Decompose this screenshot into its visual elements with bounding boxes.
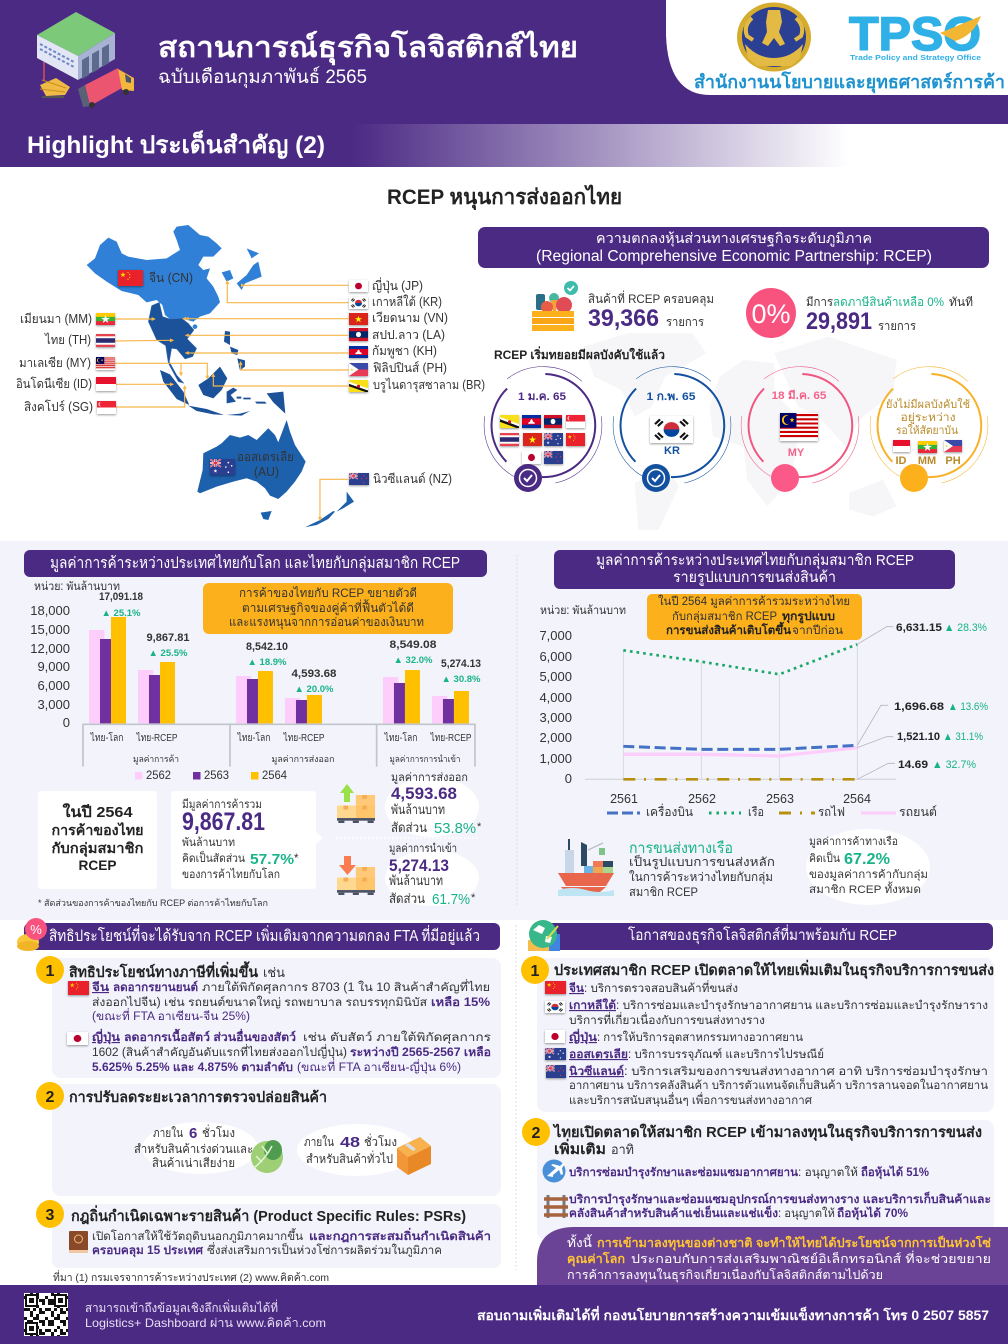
map labels: (AU) [254,465,279,479]
y axis labels: 6,000 [37,678,70,693]
export and import blobs [385,777,479,906]
growth labels [102,608,481,695]
stat: goods covered: 39,366 [588,305,659,332]
panel: benefit 2 clearance: ชั่วโมง [202,1124,235,1140]
panel: benefit 3 PSRs: และกฎการสะสมถิ่นกำเนิดสินค้า [309,1227,491,1243]
stat: import: มูลค่าการนำเข้า [389,842,457,855]
category labels: ไทย-RCEP [136,732,178,744]
panel: opportunity 2: เพิ่มเติม [554,1138,606,1158]
legend: 2563 [204,768,229,782]
heading: RCEP: RCEP หนุนการส่งออกไทย [387,184,622,211]
panel: trade value heading: มูลค่าการค้าระหว่างประเทศไทยกับโลก และไทยกับกลุ่มสมาชิก RCEP [50,554,460,573]
icon: export crates [337,784,375,823]
panel: opportunity 2: บริการบำรุงรักษาและซ่อมแซมอุปกรณ์การขนส่งทางราง และบริการเก็บสินค้าและ [569,1191,991,1207]
ring: 1 Feb 65 [613,367,731,492]
panel: benefit 1 tariffs: เช่น ตับสัตว์ ภายใต้พิกัดศุลกากร [303,1030,491,1044]
panel: total trade: 57.7% [250,851,294,868]
panel: benefit 1 tariffs: ระหว่างปี 2565-2567 เหลือ [350,1046,491,1059]
category labels: ไทย-โลก [237,731,270,744]
callout: sea share: คิดเป็น [809,851,840,865]
map labels: สปป.ลาว (LA) [372,328,445,342]
panel: benefit 2 clearance: สินค้าเน่าเสียง่าย [152,1156,235,1170]
QR code [24,1293,68,1336]
map labels: อินโดนีเซีย (ID) [16,376,92,391]
panel: benefit 2 clearance: 6 [189,1125,197,1142]
x axis labels: 2562 [688,792,716,806]
x axis labels: 2563 [766,792,794,806]
map labels: เกาหลีใต้ (KR) [372,295,442,309]
category labels: ไทย-RCEP [283,732,325,744]
icon: import crates [337,856,375,895]
callout: in 2564 all modes grew: จากปีก่อน [792,624,843,637]
panel: benefit 3 PSRs: กฎถิ่นกำเนิดเฉพาะรายสินค้า (Product Specific Rules: PSRs) [71,1205,466,1225]
callout: trade expansion: การค้าของไทยกับ RCEP ขยายตัวดี [239,586,417,600]
line value labels: ▲ 32.7% [932,759,976,771]
line value labels: ▲ 28.3% [944,622,987,634]
panel: benefit 1 tariffs: (ขณะที่ FTA อาเซียน-จีน 25%) [92,1008,250,1023]
divider dots [336,837,478,839]
panel: benefit 1 tariffs: 1602 (สินค้าสำคัญอันดับแรกที่ไทยส่งออกไปญี่ปุ่น) [92,1044,347,1059]
source note: ที่มา (1) กรมเจรจาการค้าระหว่างประเทศ (2) www.คิดค้า.com [53,1270,329,1284]
bar value labels [99,591,481,680]
category labels: มูลค่าการการนำเข้า [390,754,460,765]
y axis labels [30,603,70,730]
mid section background [0,541,1008,920]
stat: goods covered: รายการ [666,315,705,329]
stat: zero tariff: 29,891 [806,308,872,335]
map labels: ออสเตรเลีย [237,450,294,464]
y axis labels: 18,000 [30,603,70,618]
panel: total trade: มีมูลค่าการค้ารวม [182,798,262,811]
footer: สอบถามเพิ่มเติมได้ที่ กองนโยบายการสร้างความเข้มแข็งทางการค้า โทร 0 2507 5857 [477,1305,989,1323]
map labels: เวียดนาม (VN) [372,311,448,325]
RCEP agreement heading: (Regional Comprehensive Economic Partnership: RCEP) [536,248,932,265]
stat: zero tariff: 0% [751,299,791,329]
ring: not yet in force: อยู่ระหว่าง [900,412,956,424]
panel: benefit 3 PSRs [36,1200,501,1268]
stat: import: สัดส่วน [389,891,425,906]
panel: benefit 1 tariffs: (ขณะที่ FTA อาเซียน-ญี่ปุ่น 6%) [297,1059,461,1074]
logo: TPSO: TPSO [849,7,981,60]
panel: benefit 1 tariffs: สิทธิประโยชน์ทางภาษีที่เพิ่มขึ้น [69,961,258,981]
growth labels: ▲ 25.5% [149,648,188,659]
panel: benefit 1 tariffs: เช่น [263,965,285,980]
bar value labels: 9,867.81 [146,632,190,644]
x axis labels: 2564 [843,792,871,806]
stat: export: พันล้านบาท [391,802,445,817]
bar value labels: 5,274.13 [441,658,481,670]
stat: export: 4,593.68 [391,784,457,803]
callout: global value chain: ประกอบกับการส่งเสริมพาณิชย์อิเล็กทรอนิกส์ ที่จะช่วยขยาย [631,1250,991,1266]
bar value labels: 8,549.08 [390,639,436,651]
stat: zero tariff: มีการ [806,295,834,309]
panel: opportunity 2 [522,1118,994,1240]
icon: rule book [69,1231,88,1253]
line value labels: 14.69 [898,759,928,771]
text: sea transport: ในการค้าระหว่างไทยกับกลุ่ม [629,870,773,885]
panel: opportunity 1: จีน [569,982,584,995]
main title: สถานการณ์ธุรกิจโลจิสติกส์ไทย [158,29,578,65]
panel: opportunity 1: : บริการบรรจุภัณฑ์ และบริการไปรษณีย์ [628,1047,824,1061]
ring: 18 Mar 65 [741,367,859,492]
bar value labels: 8,542.10 [246,641,288,653]
stat: zero tariff: รายการ [878,319,917,333]
panel: benefit 1 tariffs: ลดอากรยานยนต์ [113,980,198,994]
category labels: ไทย-RCEP [430,732,472,744]
panel: in 2564: กับกลุ่มสมาชิก [52,840,144,857]
panel: opportunity 1: : บริการเสริมของการขนส่งทางอากาศ อาทิ บริการซ่อมบำรุงรักษา [624,1065,988,1078]
map labels: สิงคโปร์ (SG) [24,399,93,414]
RCEP agreement heading: ความตกลงหุ้นส่วนทางเศรษฐกิจระดับภูมิภาค [596,230,872,247]
ring: not yet in force: ID [896,455,907,467]
bar value labels: 17,091.18 [99,591,143,603]
text: sea transport: สมาชิก RCEP [629,885,698,899]
subtitle: ฉบับเดือนกุมภาพันธ์ 2565 [158,66,367,89]
stat: import: * [471,892,476,904]
panel: opportunity 1: ประเทศสมาชิก RCEP เปิดตลาดให้ไทยเพิ่มเติมในธุรกิจบริการการขนส่ง [554,959,994,979]
category labels: มูลค่าการค้า [133,754,179,765]
heading: logistics opportunities: โอกาสของธุรกิจโลจิสติกส์ที่มาพร้อมกับ RCEP [628,924,897,945]
panel: opportunity 1: เกาหลีใต้ [569,998,616,1012]
panel: benefit 1 tariffs: เหลือ 15% [431,996,490,1009]
panel: in 2564: RCEP [78,857,116,873]
panel: trade by transport heading: มูลค่าการค้าระหว่างประเทศไทยกับกลุ่มสมาชิก RCEP [596,551,914,570]
panel: benefit 2 clearance: ภายใน [304,1135,334,1149]
growth labels: ▲ 32.0% [394,655,433,666]
flags: map [96,270,369,485]
y axis labels: 12,000 [30,641,70,656]
stat: zero tariff: ทันที [949,295,973,309]
line value labels [894,622,988,771]
panel: opportunity 2: : อนุญาตให้ [798,1166,858,1179]
icon: percent coins [17,918,47,951]
ring: not yet in force: MM [918,455,936,467]
footer: Logistics+ Dashboard ผ่าน www.คิดค้า.com [85,1316,326,1330]
map shape: China [87,225,222,322]
organisation name: สำนักงานนโยบายและยุทธศาสตร์การค้า [694,71,1005,94]
map labels: เมียนมา (MM) [20,312,92,326]
bar value labels: 4,593.68 [292,668,336,680]
header banner [0,0,1008,124]
panel: total trade: พันล้านบาท [182,836,235,849]
category labels: ไทย-โลก [384,731,418,744]
panel: benefit 1 tariffs: 1 [46,963,55,980]
panel: benefit 2 clearance: สำหรับสินค้าทั่วไป [306,1150,393,1166]
stat: export: มูลค่าการส่งออก [391,772,468,784]
callout: in 2564 all modes grew: การขนส่งสินค้าเติบโตขึ้น [666,621,791,637]
panel: benefit 2 clearance: ภายใน [153,1126,183,1140]
y axis labels: 0 [565,771,572,786]
panel: benefit 3 PSRs: ซึ่งส่งเสริมการเป็นห่วงโซ่การผลิตร่วมในภูมิภาค [207,1242,442,1257]
legend: เรือ [748,805,764,819]
y axis labels: 0 [63,715,70,730]
legend: รถยนต์ [899,805,937,819]
legend: 2562 [146,768,171,782]
panel: opportunity 2: อาทิ [611,1142,634,1157]
legend: 2564 [262,768,287,782]
panel: opportunity 1: บริการที่เกี่ยวเนื่องกับการขนส่งทางราง [569,1012,765,1027]
stat: import: 5,274.13 [389,856,449,875]
stat: goods covered: สินค้าที่ RCEP ครอบคลุม [588,290,714,307]
line value labels: 1,696.68 [894,701,944,713]
callout: sea share [806,829,930,905]
panel: benefit 3 PSRs: เปิดโอกาสให้ใช้วัตถุดิบนอกภูมิภาคมากขึ้น [92,1228,303,1243]
panel: trade by transport heading: รายรูปแบบการขนส่งสินค้า [673,569,836,586]
RCEP agreement heading [478,227,989,268]
map labels: จีน (CN) [149,271,193,285]
category labels [90,731,472,765]
panel: in 2564 [38,791,157,889]
stat: goods covered [532,281,714,332]
panel: benefit 1 tariffs: ส่งออกไปจีน) เช่น รถยนต์ขนาดใหญ่ รถพยาบาล รถบรรทุกมินิบัส [92,995,427,1009]
map labels: ฟิลิปปินส์ (PH) [373,361,447,375]
logo: TPSO: Trade Policy and Strategy Office [850,53,981,62]
icon: railway [544,1195,568,1218]
panel: benefit 1 tariffs: ภายใต้พิกัดศุลกากร 8703 (1 ใน 10 สินค้าสำคัญที่ไทย [202,979,490,994]
panel: benefit 2 clearance [36,1082,501,1196]
heading: RCEP benefits [17,918,500,951]
panel: benefit 1 tariffs: ลดอากรเนื้อสัตว์ ส่วนอื่นของสัตว์ [124,1028,296,1044]
panel: opportunity 2: คลังสินค้าสำหรับสินค้าแช่เย็นและแช่แข็ง [569,1205,778,1220]
map labels: นิวซีแลนด์ (NZ) [373,472,452,486]
y axis labels: 9,000 [37,659,70,674]
stat: zero tariff: ลดภาษีสินค้าเหลือ 0% [833,295,944,309]
ring: 1 Jan 65: 1 ม.ค. 65 [518,391,566,403]
callout: trade expansion: และแรงหนุนจากการอ่อนค่าของเงินบาท [229,615,424,630]
callout: global value chain [537,1227,1008,1285]
rings: effective dates [484,367,988,492]
icon: lettuce [245,1135,289,1179]
legend: รถไฟ [818,805,845,819]
heading: RCEP benefits: สิทธิประโยชน์ที่จะได้รับจาก RCEP เพิ่มเติมจากความตกลง FTA ที่มีอยู่แล้ว [49,925,480,946]
line value labels: 1,521.10 [897,731,940,743]
y axis labels: 2,000 [539,730,572,745]
y axis labels [539,628,572,786]
map shape: Southeast Asia, Japan, Korea, Oceania [148,248,354,527]
line value labels: ▲ 13.6% [948,701,988,713]
ring: 1 Feb 65: KR [664,445,680,457]
legend [607,803,937,819]
stat: export: * [477,821,482,833]
callout: trade expansion [203,583,453,634]
legend: เครื่องบิน [646,803,693,819]
callout: in 2564 all modes grew: ในปี 2564 มูลค่าการค้ารวมระหว่างไทย [658,595,850,608]
panel: opportunity 2: : อนุญาตให้ [778,1207,835,1220]
callout: trade expansion: ตามเศรษฐกิจของคู่ค้าที่ฟื้นตัวได้ดี [242,599,414,616]
ring: 1 Feb 65: 1 ก.พ. 65 [646,391,696,403]
panel: opportunity 2: 2 [532,1125,541,1142]
growth labels: ▲ 18.9% [248,657,287,668]
category labels: ไทย-โลก [90,731,124,744]
panel: total trade: คิดเป็นสัดส่วน [182,850,245,865]
bar chart: trade values: หน่วย: พันล้านบาท [34,580,120,593]
map labels [16,271,485,486]
icon: airplane [542,1160,566,1182]
panel: benefit 3 PSRs: 3 [46,1207,55,1224]
panel: benefit 1 tariffs [36,956,501,1078]
panel: total trade [171,791,323,889]
y axis labels: 6,000 [539,649,572,664]
text: sea transport [629,840,775,899]
footer [0,1285,1008,1344]
heading: logistics opportunities [528,920,993,951]
growth labels: ▲ 20.0% [295,684,334,695]
panel: total trade: * [294,853,299,865]
panel: in 2564: ในปี 2564 [62,803,133,821]
panel: benefit 2 clearance: สำหรับสินค้าเร่งด่วนและ [134,1142,253,1156]
ring: not yet in force [870,367,988,492]
panel: in 2564: การค้าของไทย [52,821,144,838]
callout: sea share: มูลค่าการค้าทางเรือ [809,835,898,848]
panel: opportunity 2: ถือหุ้นได้ 70% [837,1206,908,1221]
icon: percent coins: % [30,922,42,937]
panel: trade value heading [24,550,487,577]
panel: benefit 1 tariffs: ญี่ปุ่น [92,1028,120,1045]
growth labels: ▲ 30.8% [442,674,481,685]
panel: benefit 2 clearance: 2 [46,1089,55,1106]
ring: 18 Mar 65: MY [788,447,805,459]
panel: benefit 3 PSRs: ครอบคลุม 15 ประเทศ [92,1244,204,1258]
callout: in 2564 all modes grew: ทุกรูปแบบ [782,610,835,624]
arrowheads [152,280,322,521]
line chart: transport modes [539,604,988,819]
ring: 1 Jan 65 [484,367,602,492]
y axis labels: 1,000 [539,751,572,766]
map labels: มาเลเซีย (MY) [19,356,91,370]
icon: ministry emblem [737,2,811,72]
ring: not yet in force: ยังไม่มีผลบังคับใช้ [886,398,970,411]
highlight band [0,124,850,167]
line chart: transport modes: หน่วย: พันล้านบาท [540,604,626,617]
panel: opportunity 1 [521,956,994,1112]
callout: in 2564 all modes grew: กับกลุ่มสมาชิก RCEP [672,610,777,623]
text: sea transport: เป็นรูปแบบการขนส่งหลัก [629,854,775,870]
subheading: phased entry into force: RCEP เริ่มทยอยมีผลบังคับใช้แล้ว [494,346,665,362]
callout: in 2564 all modes grew [647,594,862,640]
panel: opportunity 1: ญี่ปุ่น [569,1028,597,1045]
y axis labels: 3,000 [539,710,572,725]
map labels: บรูไนดารุสซาลาม (BR) [373,378,485,393]
callout: global value chain: ทั้งนี้ [567,1234,593,1250]
callout: global value chain: คุณค่าโลก [567,1251,625,1267]
callout: sea share: ของมูลค่าการค้ากับกลุ่ม [809,869,928,881]
line value labels: 6,631.15 [896,622,942,634]
callout: sea share: 67.2% [844,851,890,868]
x axis labels [610,792,871,806]
arrows: connector lines [115,281,348,520]
panel: benefit 1 tariffs: จีน [92,981,109,994]
panel: opportunity 1: อากาศยาน บริการคลังสินค้า บริการตัวแทนจัดเก็บสินค้า บริการลานจอดในอากาศยาน [569,1077,988,1092]
panel: benefit 2 clearance: การปรับลดระยะเวลาการตรวจปล่อยสินค้า [69,1089,327,1106]
stat: export: สัดส่วน [391,820,427,835]
panel: opportunity 2: ถือหุ้นได้ 51% [861,1165,929,1180]
category labels: มูลค่าการส่งออก [272,754,334,765]
y axis labels: 4,000 [539,690,572,705]
text: sea transport: การขนส่งทางเรือ [629,840,733,857]
map labels: ญี่ปุ่น (JP) [372,277,423,294]
x axis labels: 2561 [610,792,638,806]
line value labels: ▲ 31.1% [943,731,983,743]
map labels: ไทย (TH) [44,333,91,347]
icon: parcel box [397,1137,431,1175]
logo panel [666,0,1008,95]
panel: benefit 2 clearance: 48 [340,1134,360,1151]
panel: total trade: 9,867.81 [182,808,265,836]
bar chart: trade values [30,580,481,782]
y axis labels: 3,000 [37,697,70,712]
icon: warehouse and truck [37,12,134,108]
legend [135,768,287,782]
footnote: * สัดส่วนของการค้าของไทยกับ RCEP ต่อการค้าไทยกับโลก [38,898,268,908]
highlight band: Highlight ประเด็นสำคัญ (2) [27,130,325,159]
map: RCEP member countries [16,225,485,527]
panel: opportunity 1: 1 [531,963,540,980]
panel: benefit 2 clearance: ชั่วโมง [364,1133,397,1149]
y axis labels: 7,000 [539,628,572,643]
panel: trade by transport heading [554,550,955,589]
growth labels: ▲ 25.1% [102,608,141,619]
stat: zero tariff [746,288,973,338]
panel: opportunity 1: นิวซีแลนด์ [569,1064,624,1078]
panel: opportunity 1: : การให้บริการอุตสาหกรรมทางอวกาศยาน [597,1031,803,1044]
stat: import: พันล้านบาท [389,873,443,888]
callout: global value chain: การเข้ามาลงทุนของต่างชาติ จะทำให้ไทยได้ประโยชน์จากการเป็นห่วงโซ่ [597,1235,991,1251]
y axis labels: 5,000 [539,669,572,684]
callout: sea share: สมาชิก RCEP ทั้งหมด [809,881,921,896]
map labels: กัมพูชา (KH) [372,344,437,359]
panel: opportunity 1: ออสเตรเลีย [569,1048,628,1061]
stat: import: 61.7% [432,891,470,908]
y axis labels: 15,000 [30,622,70,637]
callout: global value chain: การค้าการลงทุนในธุรกิจเกี่ยวเนื่องกับโลจิสติกส์ตามไปด้วย [567,1266,883,1283]
stat: export: 53.8% [434,820,476,837]
ring: 18 Mar 65: 18 มี.ค. 65 [772,389,826,402]
panel: total trade: ของการค้าไทยกับโลก [182,867,280,881]
ring: not yet in force: รอให้สัตยาบัน [896,424,958,437]
icon: globe chart [528,920,560,951]
panel: opportunity 1: : บริการซ่อมและบำรุงรักษาอากาศยาน และบริการซ่อมและบำรุงรักษาราง [616,999,988,1012]
panel: opportunity 2: ไทยเปิดตลาดให้สมาชิก RCEP เข้ามาลงทุนในธุรกิจบริการการขนส่ง [552,1123,982,1141]
icon: goods crate [532,281,578,331]
background: faint world map [584,333,897,530]
stat: import [337,842,476,908]
panel: opportunity 1: : บริการตรวจสอบสินค้าที่ขนส่ง [584,980,738,995]
panel: opportunity 2: บริการซ่อมบำรุงรักษาและซ่อมแซมอากาศยาน [569,1165,798,1180]
panel: benefit 1 tariffs: 5.625% 5.25% และ 4.875% ตามลำดับ [92,1060,293,1074]
stat: export [337,772,482,837]
footer: สามารถเข้าถึงข้อมูลเชิงลึกเพิ่มเติมได้ที่ [85,1299,278,1316]
icon: cargo ship [558,839,614,896]
ring: not yet in force: PH [945,455,961,467]
panel: opportunity 1: และบริการสนับสนุนอื่นๆ เพื่อการขนส่งทางอากาศ [569,1092,813,1107]
